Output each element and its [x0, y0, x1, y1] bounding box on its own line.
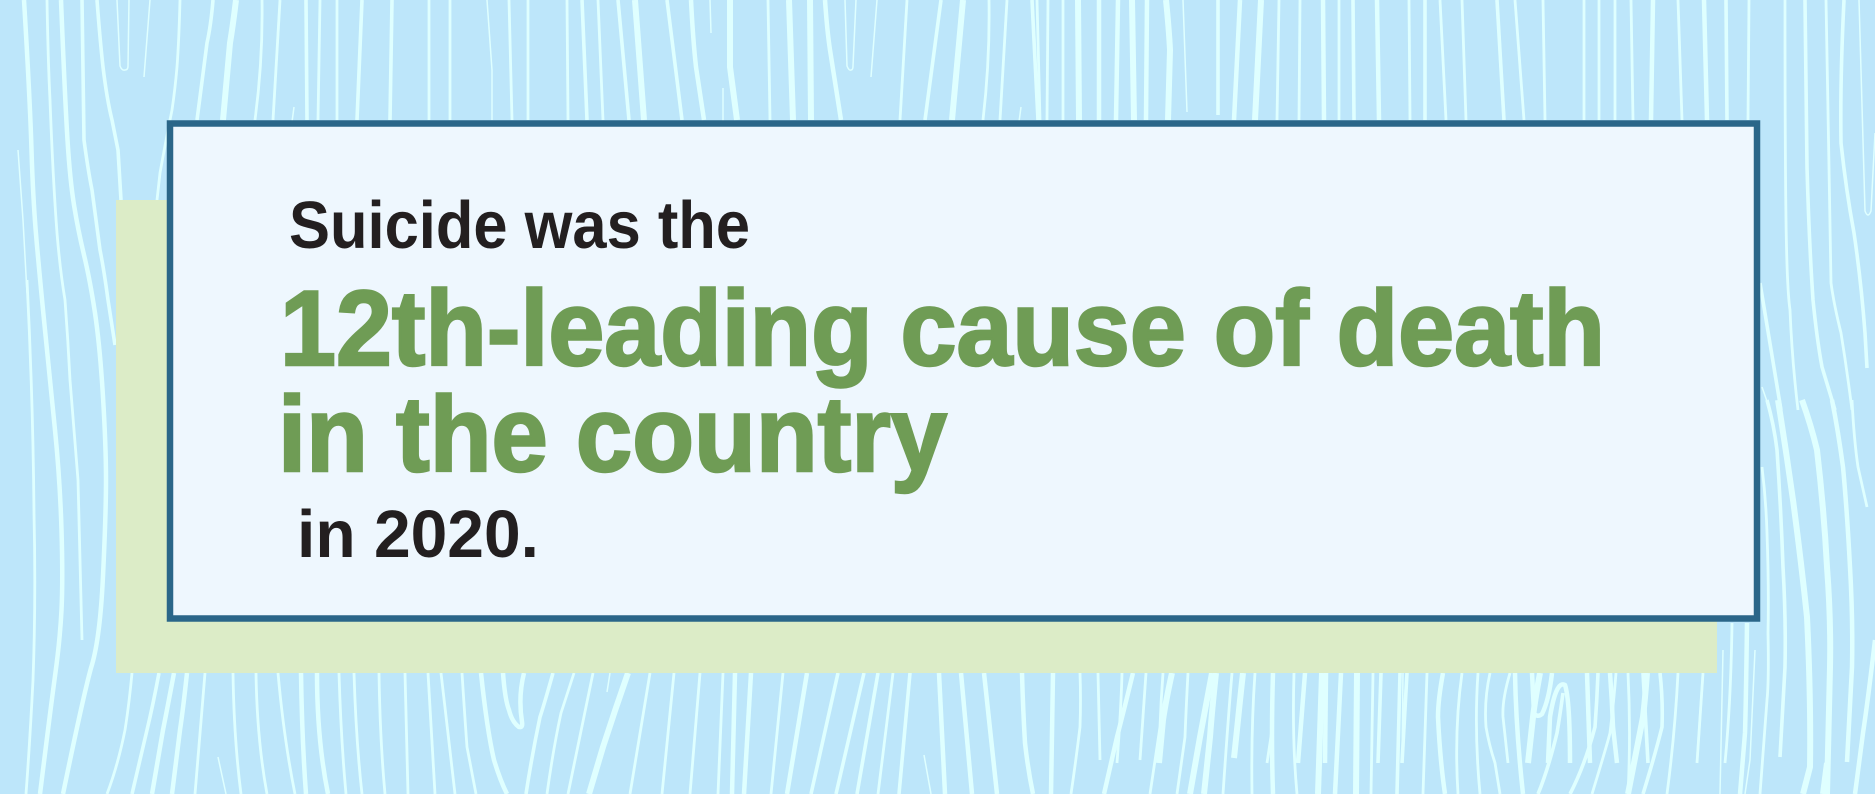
green offset shadow block [116, 200, 1717, 673]
text: intro line: Suicide was the [289, 188, 750, 263]
heading: in the country: in the country [278, 374, 947, 494]
text: closing line: in 2020. [297, 497, 539, 572]
panel: bordered callout box [170, 124, 1757, 618]
heading: 12th-leading cause of death: 12th-leading cause of death [280, 268, 1605, 388]
